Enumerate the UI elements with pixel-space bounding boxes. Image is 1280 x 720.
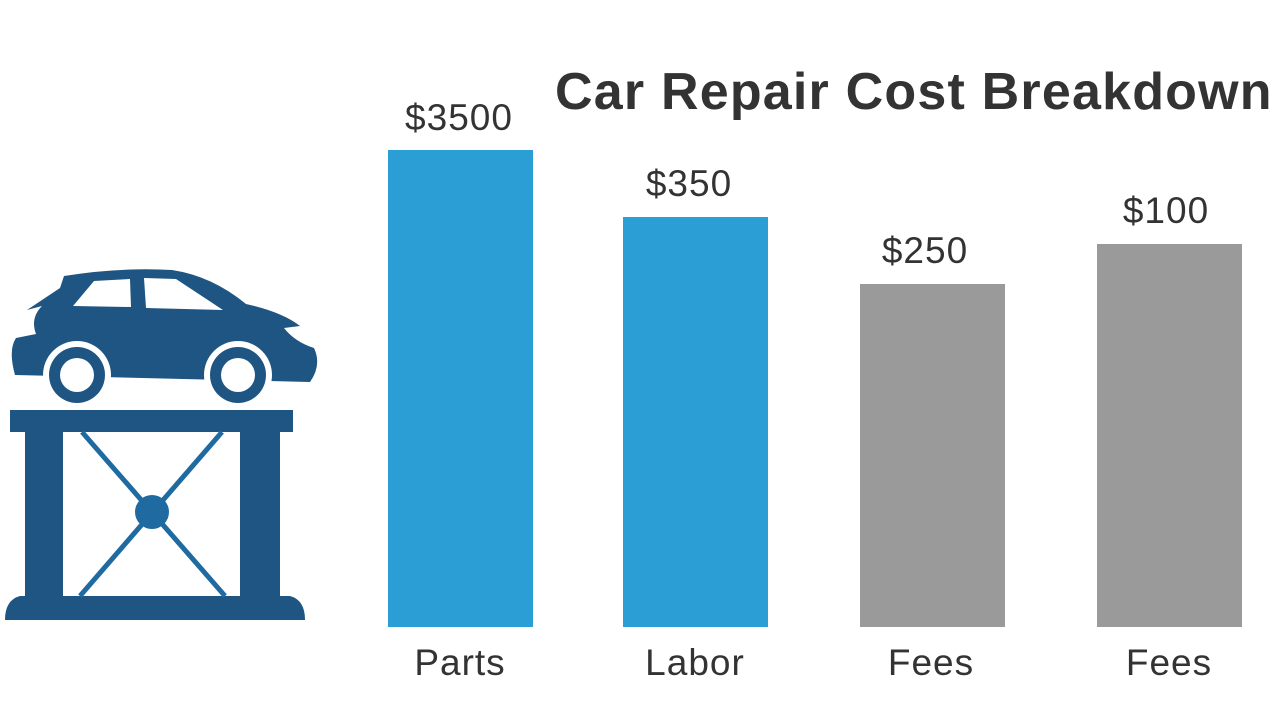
bar: Labor bbox=[623, 217, 768, 627]
bar: Fees bbox=[860, 284, 1005, 627]
value: Parts: $3500 bbox=[405, 97, 513, 138]
bar: Parts bbox=[388, 150, 533, 627]
value: Fees 2: $100 bbox=[1123, 190, 1209, 231]
value: Fees: $250 bbox=[882, 230, 968, 271]
title: Car Repair Cost Breakdown bbox=[555, 63, 1273, 121]
icon: car on lift bbox=[5, 269, 318, 620]
label: Fees 2: Fees bbox=[1126, 642, 1212, 683]
label: Fees: Fees bbox=[888, 642, 974, 683]
label: Parts: Parts bbox=[414, 642, 506, 683]
bar: Fees 2 bbox=[1097, 244, 1242, 627]
label: Labor: Labor bbox=[645, 642, 745, 683]
value: Labor: $350 bbox=[646, 163, 732, 204]
